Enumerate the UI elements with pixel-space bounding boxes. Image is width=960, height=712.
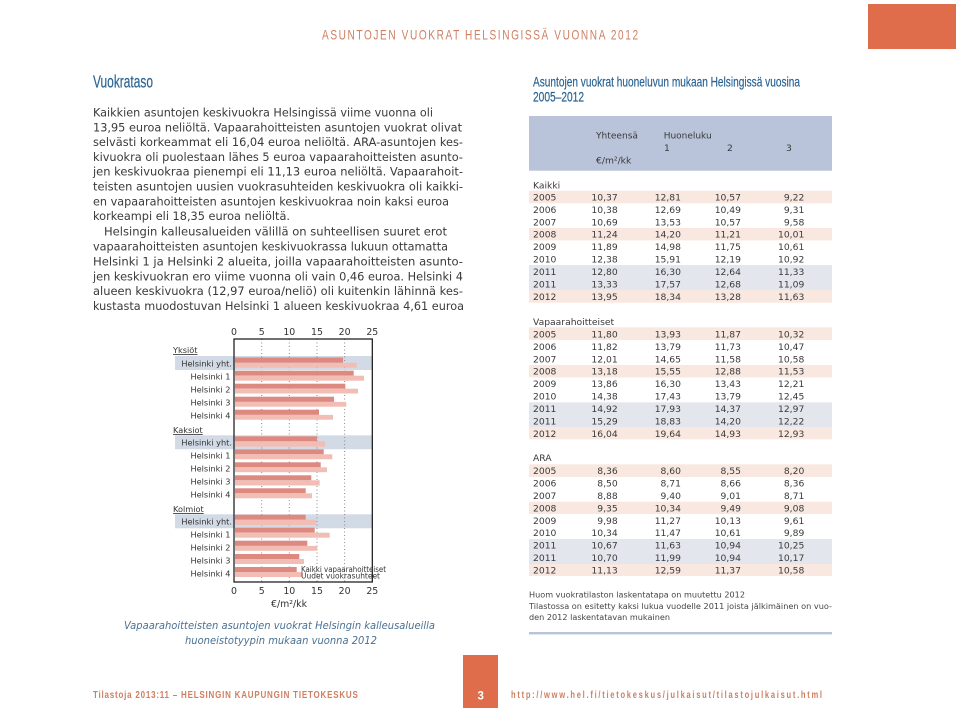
table section: Kaikki: 15,91 xyxy=(655,255,681,266)
table section: Kaikki: 17,57 xyxy=(655,280,681,290)
table section: Kaikki: 11,09 xyxy=(778,280,804,290)
page title: ASUNTOJEN VUOKRAT HELSINGISSÄ VUONNA 2012 xyxy=(322,27,638,43)
top axis labels: 5 xyxy=(259,327,265,338)
table section: Kaikki: 2008 xyxy=(533,230,557,241)
table section: Kaikki: 10,57 xyxy=(715,192,741,203)
table section: ARA: 2008 xyxy=(533,503,557,514)
table section: Kaikki: 13,28 xyxy=(715,292,741,303)
table section: Vapaarahoitteiset: 12,21 xyxy=(778,379,804,390)
table section: Kaikki: 2011 xyxy=(533,280,556,290)
table section: ARA: 11,63 xyxy=(655,541,681,552)
table section: Kaikki: 2007 xyxy=(533,217,557,228)
body text: kivuokra oli puolestaan lähes 5 euroa vapaarahoitteisten asunto- xyxy=(93,150,463,164)
row labels: Kaksiot: Helsinki 4 xyxy=(190,490,230,500)
legend: Kaikki vapaarahoitteiset xyxy=(301,565,386,574)
table section: Vapaarahoitteiset: 11,73 xyxy=(715,342,741,353)
body text: Helsinki 1 ja Helsinki 2 alueita, joilla vapaarahoitteisten asunto- xyxy=(93,255,463,269)
row labels: Yksiöt: Helsinki 1 xyxy=(190,372,230,382)
legend: Uudet vuokrasuhteet xyxy=(301,572,380,580)
table section: Vapaarahoitteiset: 11,87 xyxy=(715,329,741,340)
bottom axis labels: 25 xyxy=(366,586,378,597)
row labels: Yksiöt: Helsinki 3 xyxy=(190,398,230,408)
chart caption xyxy=(124,619,435,647)
table section: Vapaarahoitteiset: 12,45 xyxy=(778,392,804,403)
left heading: Vuokrataso xyxy=(93,72,153,92)
table section: ARA: 11,37 xyxy=(715,566,741,576)
table section: Kaikki: 12,38 xyxy=(591,255,618,266)
table section: ARA: 9,49 xyxy=(721,503,741,514)
legend xyxy=(301,565,386,580)
table section: Kaikki: 14,20 xyxy=(655,230,681,241)
table section: Vapaarahoitteiset: 10,47 xyxy=(778,342,804,353)
table section: Vapaarahoitteiset: 14,65 xyxy=(655,354,681,365)
body text: jen keskivuokraa pienempi eli 11,13 euroa neliöltä. Vapaarahoit- xyxy=(92,165,463,179)
body text: Kaikkien asuntojen keskivuokra Helsingissä viime vuonna oli xyxy=(93,106,433,120)
row labels: Kaksiot: Helsinki 3 xyxy=(190,476,230,486)
table section: ARA: 9,40 xyxy=(661,491,681,502)
row labels: Kaksiot: Helsinki yht. xyxy=(181,438,232,448)
table section: Vapaarahoitteiset: 2012 xyxy=(533,429,556,440)
table section: Kaikki: 13,33 xyxy=(591,280,618,290)
table section: Vapaarahoitteiset: 12,88 xyxy=(715,367,741,378)
top axis labels: 20 xyxy=(339,327,351,338)
table section: Vapaarahoitteiset: 13,86 xyxy=(591,379,618,390)
table section: Vapaarahoitteiset: 12,22 xyxy=(778,416,804,427)
table section: ARA: 2011 xyxy=(533,553,556,564)
bottom axis labels xyxy=(231,586,378,597)
table section: Kaikki: 11,33 xyxy=(778,267,804,278)
table section: ARA: 10,58 xyxy=(778,566,804,576)
table section: Kaikki: 18,34 xyxy=(655,292,681,303)
table header xyxy=(529,116,832,171)
bars: Kaksiot xyxy=(235,436,332,498)
table section: Vapaarahoitteiset: 11,82 xyxy=(591,342,618,353)
table section: Kaikki: 10,57 xyxy=(715,217,741,228)
table section: ARA: 2012 xyxy=(533,566,556,576)
table section: ARA: 9,89 xyxy=(784,528,804,539)
table section: ARA: 12,59 xyxy=(655,566,681,576)
table section: Kaikki: 13,53 xyxy=(655,217,681,228)
table footnotes: Huom vuokratilaston laskentatapa on muutettu 2012 xyxy=(529,590,745,600)
table section: ARA: 10,61 xyxy=(715,528,741,539)
table section: ARA xyxy=(529,453,832,576)
table section: Kaikki: 10,61 xyxy=(778,242,804,253)
table section: Vapaarahoitteiset: 2008 xyxy=(533,367,557,378)
table header: €/m²/kk xyxy=(596,156,632,166)
table section: ARA: 8,50 xyxy=(597,478,618,490)
table section: Vapaarahoitteiset: 13,79 xyxy=(655,342,681,353)
row labels: Yksiöt: Helsinki 2 xyxy=(190,384,230,394)
table section: Kaikki: 11,21 xyxy=(715,230,741,241)
table section: Vapaarahoitteiset: 2007 xyxy=(533,354,557,365)
table section: Kaikki: 11,89 xyxy=(591,242,618,253)
table section: Vapaarahoitteiset: 14,93 xyxy=(715,429,741,440)
table header: 3 xyxy=(786,143,792,154)
table section: Vapaarahoitteiset: 11,80 xyxy=(591,329,618,340)
table header: Huoneluku xyxy=(664,130,712,141)
page number block: 3 xyxy=(477,690,484,702)
table section: Kaikki: 11,75 xyxy=(715,242,741,253)
table section: Kaikki: 14,98 xyxy=(655,242,681,253)
table section: ARA: 8,36 xyxy=(597,466,618,477)
row labels: Kolmiot: Helsinki 1 xyxy=(190,530,230,540)
top axis labels: 25 xyxy=(366,327,378,338)
row labels: Yksiöt: Helsinki 4 xyxy=(190,410,230,420)
row labels: Kolmiot: Helsinki yht. xyxy=(181,516,232,526)
body text xyxy=(92,106,464,313)
table section: Kaikki: 10,69 xyxy=(591,217,618,228)
body text: teisten asuntojen uusien vuokrasuhteiden keskivuokra oli kaikki- xyxy=(93,180,463,194)
table section: ARA: 10,13 xyxy=(715,516,741,527)
table footnotes: den 2012 laskentatavan mukainen xyxy=(529,612,670,622)
table section: ARA: 10,67 xyxy=(591,541,618,552)
bottom axis labels: 15 xyxy=(311,586,323,597)
table section: Vapaarahoitteiset: 13,18 xyxy=(591,367,618,378)
table section: Kaikki: 2010 xyxy=(533,255,557,266)
table section: Kaikki: 12,64 xyxy=(715,267,741,278)
body text: vapaarahoitteisten asuntojen keskivuokrassa lukuun ottamatta xyxy=(93,240,448,254)
table section: ARA: 10,94 xyxy=(715,553,741,564)
body text: jen keskivuokran ero viime vuonna oli vain 0,46 euroa. Helsinki 4 xyxy=(92,269,463,283)
table section: Vapaarahoitteiset: 11,58 xyxy=(715,354,741,365)
table section: Vapaarahoitteiset: 17,93 xyxy=(655,404,681,415)
table section: ARA: 2007 xyxy=(533,491,557,502)
table section: ARA: 10,34 xyxy=(591,528,618,539)
row labels: Kolmiot: Helsinki 2 xyxy=(190,542,230,552)
table section: Kaikki: 2006 xyxy=(533,205,557,216)
table section: ARA: 9,01 xyxy=(721,491,741,502)
table section: Vapaarahoitteiset: 11,53 xyxy=(778,367,804,378)
row labels: Kaksiot: Helsinki 1 xyxy=(190,450,230,460)
row labels: Yksiöt xyxy=(172,345,232,420)
table section: Kaikki: 10,49 xyxy=(715,205,741,216)
table section: ARA: 10,94 xyxy=(715,541,741,552)
bars: Kolmiot xyxy=(235,515,330,577)
table section: Vapaarahoitteiset: 15,29 xyxy=(591,416,618,427)
table section: Kaikki xyxy=(529,180,832,303)
table section: Kaikki: 10,01 xyxy=(778,230,804,241)
footer url: http://www.hel.fi/tietokeskus/julkaisut/tilastojulkaisut.html xyxy=(511,689,822,700)
top axis labels: 15 xyxy=(311,327,323,338)
table section: Vapaarahoitteiset: 18,83 xyxy=(655,416,681,427)
row labels: Kolmiot xyxy=(173,504,232,578)
body text: en vapaarahoitteisten asuntojen keskivuokraa noin kaksi euroa xyxy=(93,194,449,208)
table section: Kaikki: 2012 xyxy=(533,292,556,303)
row labels: Kaksiot xyxy=(173,425,232,500)
table section: ARA: 2005 xyxy=(533,466,557,477)
top axis labels: 0 xyxy=(231,327,237,338)
table section: Vapaarahoitteiset: 12,01 xyxy=(591,354,618,365)
table section: ARA: 2006 xyxy=(533,478,557,490)
bottom axis labels: 10 xyxy=(283,586,295,597)
row labels: Kolmiot: Helsinki 4 xyxy=(190,568,230,578)
row labels: Kolmiot: Helsinki 3 xyxy=(190,556,230,566)
table section: Vapaarahoitteiset: 16,30 xyxy=(655,379,681,390)
table section: Kaikki: 10,92 xyxy=(778,255,804,266)
chart caption: huoneistotyypin mukaan vuonna 2012 xyxy=(185,634,377,647)
table section: Kaikki: 2005 xyxy=(533,192,557,203)
table section: Kaikki: 12,69 xyxy=(655,205,681,216)
table section: Vapaarahoitteiset: 2005 xyxy=(533,329,557,340)
table section: Kaikki: 12,81 xyxy=(655,192,681,203)
table section: ARA: 11,99 xyxy=(655,553,681,564)
table section: Kaikki: 10,38 xyxy=(591,205,618,216)
top axis labels xyxy=(231,327,378,338)
top axis labels: 10 xyxy=(283,327,295,338)
bottom axis labels: 5 xyxy=(259,586,265,597)
table section: Kaikki: 12,68 xyxy=(715,280,741,290)
table section: Vapaarahoitteiset: 13,79 xyxy=(715,392,741,403)
table footnotes xyxy=(528,590,832,622)
table header: 2 xyxy=(727,143,733,154)
table section: Kaikki: 16,30 xyxy=(655,267,681,278)
bottom axis labels: 20 xyxy=(339,586,351,597)
bars: Yksiöt xyxy=(235,358,364,420)
body text: Helsingin kalleusalueiden välillä on suhteellisen suuret erot xyxy=(104,225,447,239)
table header: Yhteensä xyxy=(595,130,638,141)
table section: Vapaarahoitteiset: 2011 xyxy=(533,404,556,415)
table section: Kaikki: 9,22 xyxy=(784,192,804,203)
body text: alueen keskivuokra (12,97 euroa/neliö) oli kuitenkin lähinnä kes- xyxy=(93,284,463,298)
table section: Kaikki: 11,24 xyxy=(591,230,618,241)
chart caption: Vapaarahoitteisten asuntojen vuokrat Helsingin kalleusalueilla xyxy=(124,619,435,632)
table section: ARA: 2010 xyxy=(533,528,557,539)
table header: 1 xyxy=(664,143,670,154)
table section: ARA: 10,25 xyxy=(778,541,804,552)
axis unit: €/m²/kk xyxy=(271,599,308,610)
table section: Kaikki: 12,80 xyxy=(591,267,618,278)
table section: Vapaarahoitteiset xyxy=(529,317,832,440)
row labels: Kaksiot: Helsinki 2 xyxy=(190,464,230,474)
table section: ARA: 2009 xyxy=(533,516,557,527)
footer left: Tilastoja 2013:11 – HELSINGIN KAUPUNGIN TIETOKESKUS xyxy=(93,689,358,700)
table section: ARA: 8,36 xyxy=(784,478,804,490)
table section: Vapaarahoitteiset: 13,43 xyxy=(715,379,741,390)
table section: Kaikki: 12,19 xyxy=(715,255,741,266)
table section: Vapaarahoitteiset: 15,55 xyxy=(655,367,681,378)
table section: Vapaarahoitteiset: 12,93 xyxy=(778,429,804,440)
table section: ARA: 9,08 xyxy=(784,503,804,514)
table section: ARA: 10,34 xyxy=(655,503,681,514)
right heading: 2005–2012 xyxy=(533,88,584,104)
bottom axis labels: 0 xyxy=(231,586,237,597)
body text: kustasta muodostuvan Helsinki 1 alueen keskivuokraa 4,61 euroa xyxy=(93,299,464,313)
page number block xyxy=(463,655,498,708)
table section: Vapaarahoitteiset: 19,64 xyxy=(655,429,681,440)
body text: selvästi korkeammat eli 16,04 euroa neliöltä. ARA-asuntojen kes- xyxy=(93,135,463,149)
right heading: Asuntojen vuokrat huoneluvun mukaan Helsingissä vuosina xyxy=(533,74,800,90)
table section: ARA: 8,66 xyxy=(721,478,741,490)
table section: Vapaarahoitteiset: 17,43 xyxy=(655,392,681,403)
row labels: Kolmiot: Kolmiot xyxy=(173,504,205,514)
header block: orange corner xyxy=(868,4,956,49)
table section: Kaikki: 11,63 xyxy=(778,292,804,303)
row labels: Yksiöt: Helsinki yht. xyxy=(181,358,232,368)
body text: korkeampi eli 18,35 euroa neliöltä. xyxy=(93,209,290,223)
table section: Kaikki: 13,95 xyxy=(591,292,618,303)
table footnotes: Tilastossa on esitetty kaksi lukua vuodelle 2011 joista jälkimäinen on vuo- xyxy=(528,601,832,611)
table section: Vapaarahoitteiset: 14,20 xyxy=(715,416,741,427)
table section: Vapaarahoitteiset: 2011 xyxy=(533,416,556,427)
table section: ARA: 10,17 xyxy=(778,553,804,564)
table section: Kaikki: 10,37 xyxy=(591,192,618,203)
table section: Kaikki: 9,58 xyxy=(784,217,804,228)
table section: ARA: 9,61 xyxy=(784,516,804,527)
table section: Vapaarahoitteiset: 2010 xyxy=(533,392,557,403)
table section: Vapaarahoitteiset: 14,37 xyxy=(715,404,741,415)
table section: Vapaarahoitteiset: 16,04 xyxy=(591,429,618,440)
table section: ARA: 8,71 xyxy=(661,478,681,490)
body text: 13,95 euroa neliöltä. Vapaarahoitteisten asuntojen vuokrat olivat xyxy=(93,120,462,134)
table section: Vapaarahoitteiset: 2006 xyxy=(533,342,557,353)
bar chart: rents by district and dwelling type xyxy=(172,327,386,610)
table section: ARA: 11,47 xyxy=(655,528,681,539)
table section: ARA: 2011 xyxy=(533,541,556,552)
table section: ARA: 8,60 xyxy=(661,466,681,477)
table section: ARA: 10,70 xyxy=(591,553,618,564)
chart frame xyxy=(234,339,372,582)
table section: ARA: 9,35 xyxy=(597,503,618,514)
table section: Kaikki: 2011 xyxy=(533,267,556,278)
row labels: Kaksiot: Kaksiot xyxy=(173,425,204,435)
table section: ARA: 8,20 xyxy=(784,466,804,477)
table section: ARA: 8,88 xyxy=(597,491,618,502)
table section: ARA: 9,98 xyxy=(597,516,618,527)
row labels: Yksiöt: Yksiöt xyxy=(172,345,198,355)
table section: Kaikki: Kaikki xyxy=(533,180,560,191)
table section: ARA: 11,27 xyxy=(655,516,681,527)
table section: ARA: 8,71 xyxy=(784,491,804,502)
table section: Vapaarahoitteiset: 13,93 xyxy=(655,329,681,340)
table section: ARA: 8,55 xyxy=(721,466,741,477)
table section: ARA: ARA xyxy=(533,453,552,464)
table section: Vapaarahoitteiset: 2009 xyxy=(533,379,557,390)
table section: Vapaarahoitteiset: 14,92 xyxy=(591,404,618,415)
table section: Vapaarahoitteiset: 10,32 xyxy=(778,329,804,340)
table section: Kaikki: 2009 xyxy=(533,242,557,253)
table section: Kaikki: 9,31 xyxy=(784,205,804,216)
table section: Vapaarahoitteiset: 14,38 xyxy=(591,392,618,403)
table section: ARA: 11,13 xyxy=(591,566,618,576)
table section: Vapaarahoitteiset: 10,58 xyxy=(778,354,804,365)
right heading xyxy=(533,74,800,104)
table section: Vapaarahoitteiset: 12,97 xyxy=(778,404,804,415)
table section: Vapaarahoitteiset: Vapaarahoitteiset xyxy=(533,317,615,328)
